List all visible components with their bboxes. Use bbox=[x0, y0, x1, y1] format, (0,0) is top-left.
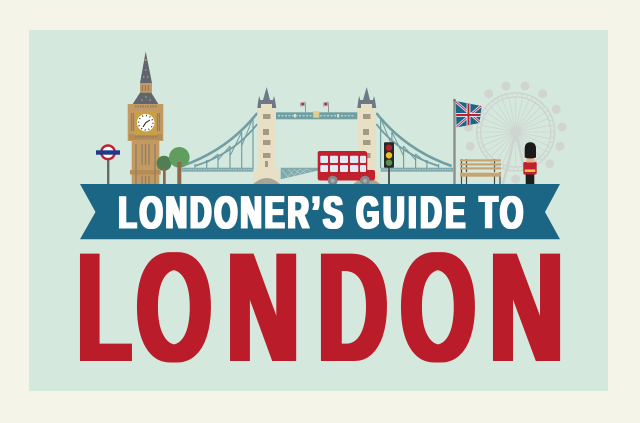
heading: Londoner's Guide To bbox=[118, 188, 523, 239]
title: LONDON: L bbox=[78, 219, 131, 394]
illustration: London skyline bbox=[96, 52, 566, 186]
icon: trees bbox=[156, 147, 190, 184]
heading: Londoner's Guide To: LONDONER’S bbox=[118, 188, 343, 239]
icon: park bench bbox=[460, 159, 501, 184]
infographic canvas bbox=[29, 30, 608, 391]
icon: Union Jack flag bbox=[453, 98, 482, 184]
heading: Londoner's Guide To: GUIDE bbox=[356, 188, 465, 239]
icon: red double-decker bus bbox=[318, 151, 375, 186]
icon: Queen's Guard bbox=[523, 142, 537, 184]
title: LONDON: D bbox=[318, 221, 388, 395]
icon: traffic light bbox=[384, 142, 394, 184]
title: LONDON: O bbox=[400, 221, 475, 395]
title: LONDON: O bbox=[136, 221, 211, 395]
title: LONDON: N bbox=[227, 220, 299, 394]
heading: Londoner's Guide To: TO bbox=[480, 188, 523, 239]
icon: London Underground sign bbox=[96, 146, 120, 184]
panel: mint background bbox=[29, 30, 608, 391]
title: LONDON bbox=[78, 219, 563, 395]
title: LONDON: N bbox=[490, 220, 563, 394]
banner: ribbon title bbox=[80, 184, 560, 239]
icon: Big Ben bbox=[128, 52, 163, 184]
icon: London Eye bbox=[464, 82, 566, 184]
icon: Tower Bridge bbox=[182, 87, 453, 184]
